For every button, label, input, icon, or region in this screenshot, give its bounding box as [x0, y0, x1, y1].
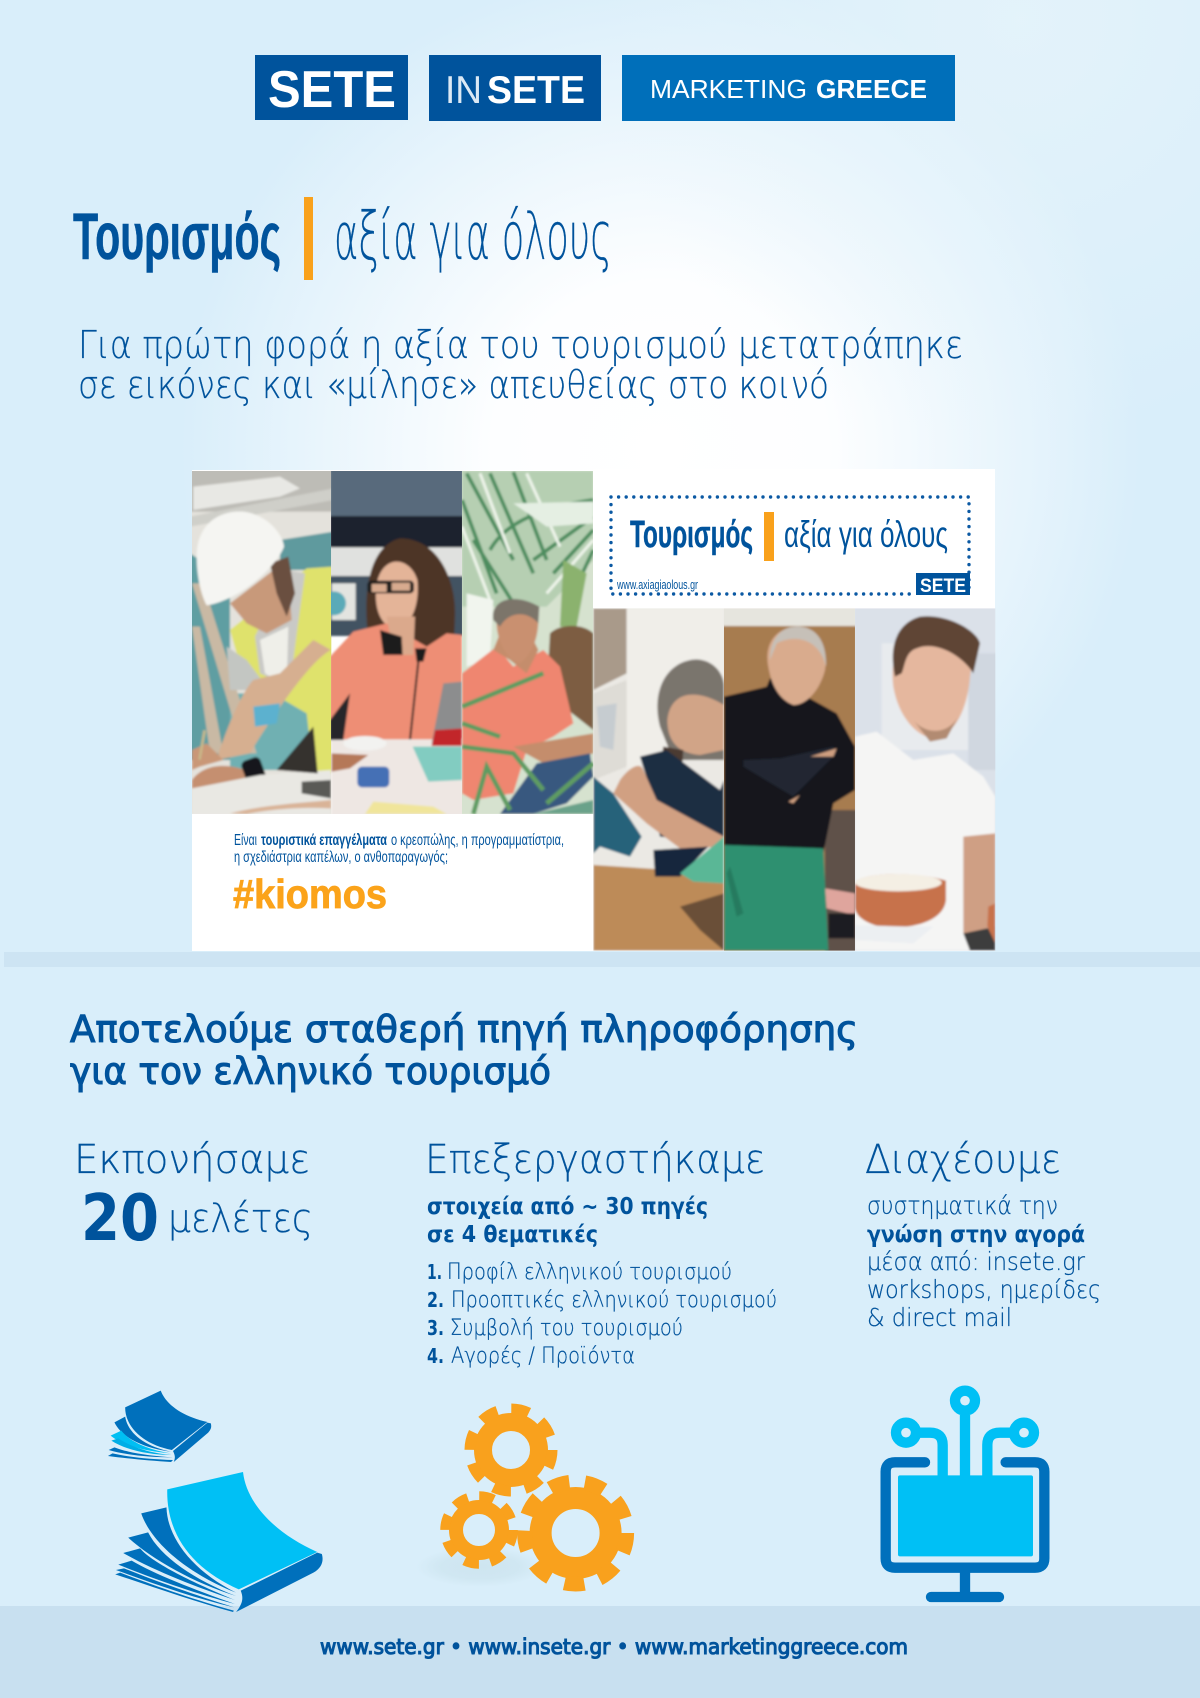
numbered list: Προφίλ ελληνικού τουρισμού: [447, 1260, 732, 1285]
column: distribution: μέσα από: insete.gr: [867, 1247, 1086, 1276]
dotted frame: [611, 497, 969, 594]
numbered list: 1.: [427, 1260, 442, 1284]
column: processing: Επεξεργαστήκαμε: [425, 1137, 765, 1183]
numbered list: 3.: [427, 1316, 444, 1340]
logo: INSETE: [429, 55, 601, 121]
column: processing: [425, 1137, 777, 1369]
icon: small book: [108, 1391, 211, 1462]
logo: Marketing Greece: [622, 55, 955, 121]
small divider bar: [764, 512, 774, 561]
screen: [898, 1475, 1033, 1556]
gear: left: [445, 1496, 513, 1564]
column: distribution: [865, 1137, 1101, 1332]
circuit lines and nodes: [896, 1391, 1034, 1477]
monitor frame and stand: [886, 1462, 1044, 1597]
logo: INSETE: IN: [445, 69, 482, 112]
column: studies: Εκπονήσαμε: [74, 1137, 310, 1183]
numbered list: Προοπτικές ελληνικού τουρισμού: [451, 1288, 777, 1313]
column: processing: σε 4 θεματικές: [427, 1222, 598, 1248]
logo: SETE: SETE: [268, 61, 396, 119]
section heading: για τον ελληνικό τουρισμό: [70, 1050, 551, 1093]
footer band: www.sete.gr • www.insete.gr • www.marketinggreece.com: [320, 1635, 908, 1659]
numbered list: [427, 1260, 777, 1369]
gear shadow: [416, 1547, 544, 1587]
numbered list: Αγορές / Προϊόντα: [451, 1344, 635, 1369]
gear: large: [525, 1482, 627, 1584]
icon: gears: [416, 1409, 627, 1587]
logo: Marketing Greece: GREECE: [816, 74, 927, 104]
poster caption: [234, 832, 564, 866]
title: Τουρισμός: [73, 199, 281, 273]
icon: large book: [115, 1472, 323, 1612]
subtitle: [78, 323, 963, 407]
column: studies: [74, 1137, 313, 1256]
photo: potter: [853, 607, 998, 953]
small SETE logo: SETE: [920, 576, 966, 597]
photo: builder: [190, 468, 333, 815]
section heading: [70, 1008, 858, 1093]
hashtag: #kiomos: [233, 871, 387, 917]
poster header box: Τουρισμός: [630, 514, 753, 556]
numbered list: 2.: [427, 1288, 444, 1312]
footer band: [0, 1606, 1200, 1698]
photo: chef: [722, 607, 857, 953]
poster header box: αξία για όλους: [784, 514, 948, 555]
photo: programmer: [322, 468, 464, 816]
title divider bar: [304, 197, 313, 280]
photo: flower grower: [460, 468, 597, 815]
poster caption: τουριστικά επαγγέλματα: [261, 832, 387, 849]
column: distribution: γνώση στην αγορά: [867, 1222, 1085, 1248]
column: distribution: Διαχέουμε: [865, 1137, 1061, 1183]
icon: books: [108, 1391, 323, 1612]
poster caption: η σχεδιάστρια καπέλων, ο ανθοπαραγωγός;: [234, 849, 448, 866]
big number 20: 20: [81, 1182, 159, 1256]
title: [73, 197, 612, 280]
campaign poster: [190, 468, 998, 953]
divider band: [4, 952, 1200, 967]
column: distribution: συστηματικά την: [867, 1191, 1058, 1220]
poster caption: Είναι: [234, 832, 257, 849]
poster caption: ο κρεοπώλης, η προγραμματίστρια,: [391, 832, 564, 849]
icon: monitor: [886, 1391, 1044, 1597]
gear: top: [470, 1409, 552, 1491]
column: studies: μελέτες: [168, 1196, 313, 1242]
subtitle: σε εικόνες και «μίλησε» απευθείας στο κοινό: [78, 363, 829, 407]
column: distribution: workshops, ημερίδες: [867, 1275, 1101, 1304]
photos right: milliner, chef, potter: [590, 607, 998, 953]
logo: Marketing Greece: MARKETING: [650, 74, 807, 104]
logo: INSETE: SETE: [487, 69, 585, 112]
numbered list: 4.: [427, 1344, 444, 1368]
poster header box: www.axiagiaolous.gr: [616, 577, 698, 592]
poster header box: [593, 469, 995, 608]
photos left: builder, programmer, flower grower: [190, 468, 597, 816]
poster white base: [192, 470, 995, 951]
logos row: [255, 55, 955, 121]
section heading: Αποτελούμε σταθερή πηγή πληροφόρησης: [70, 1008, 858, 1051]
photo: milliner: [590, 607, 727, 953]
title: αξία για όλους: [334, 198, 612, 275]
column: distribution: & direct mail: [867, 1303, 1012, 1332]
column: processing: στοιχεία από ~ 30 πηγές: [427, 1194, 708, 1220]
subtitle: Για πρώτη φορά η αξία του τουρισμού μετατράπηκε: [78, 323, 963, 367]
numbered list: Συμβολή του τουρισμού: [450, 1316, 683, 1341]
